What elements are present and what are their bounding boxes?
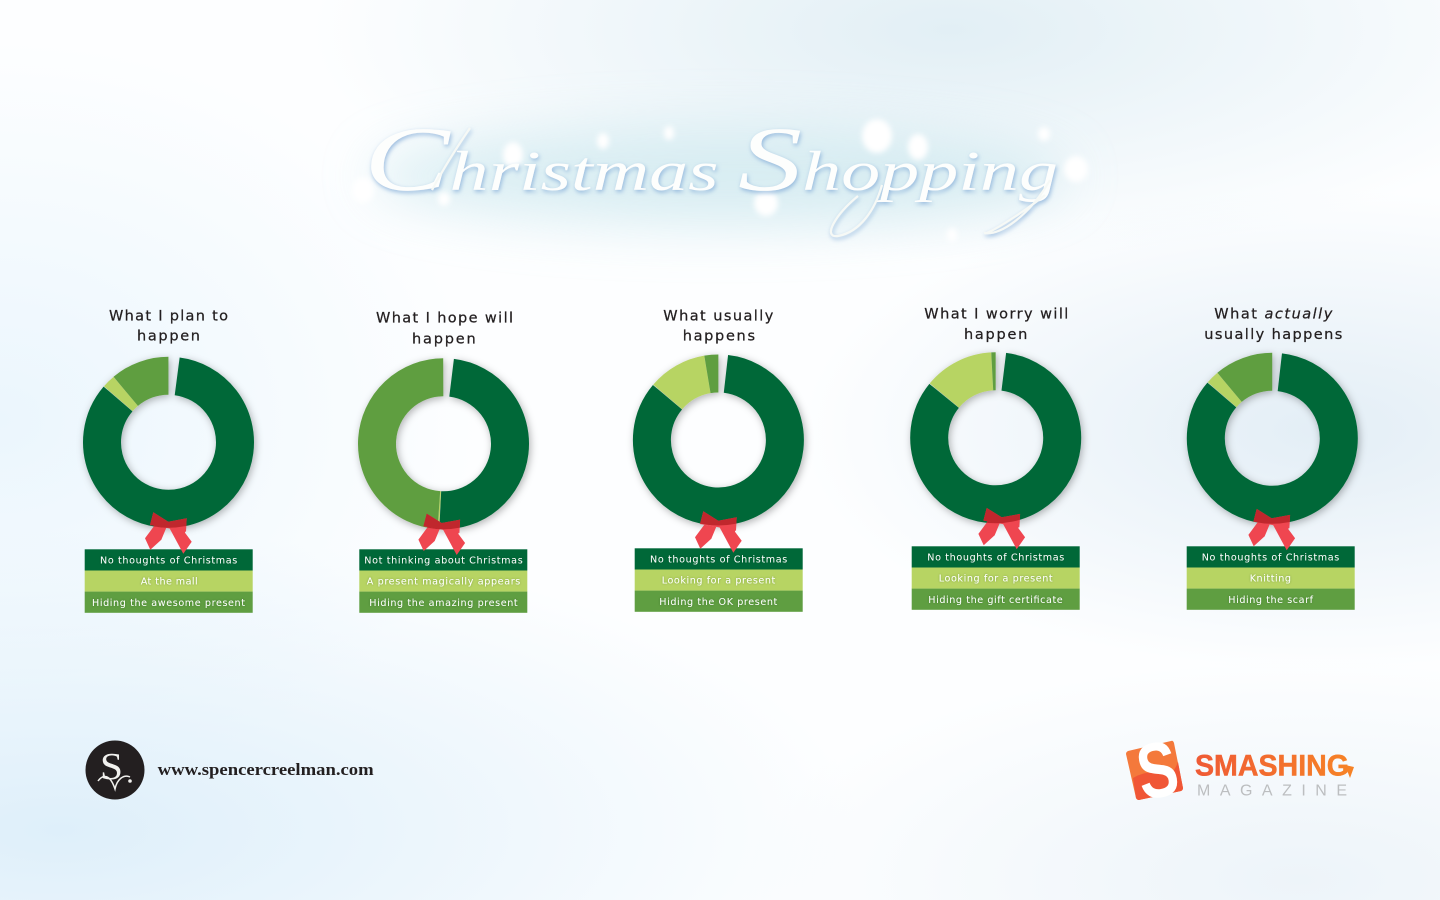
- legend text 3: [650, 554, 787, 608]
- heading 3: What usually: [663, 309, 774, 325]
- heading 2: What I hope will: [376, 310, 513, 326]
- legend text 1: [92, 555, 245, 609]
- legend text 2: Not thinking about Christmas: [364, 555, 523, 566]
- donut 5: [1178, 344, 1366, 532]
- heading 4: happen: [964, 327, 1027, 343]
- author website: www.spencercreelman.com: [158, 760, 374, 779]
- chart 5: What actually usually happens: [1178, 307, 1366, 610]
- chart 1: What I plan to happen: [75, 309, 262, 613]
- heading 4: [924, 306, 1068, 343]
- heading 1: happen: [137, 329, 200, 345]
- title with glow and snow bokeh: [352, 108, 1088, 242]
- legend bars 1: [85, 549, 253, 613]
- legend text 5: Hiding the scarf: [1228, 595, 1314, 606]
- chart 4: What I worry will happen: [902, 306, 1089, 610]
- legend text 5: Knitting: [1250, 574, 1291, 585]
- arrow on wordmark: [1345, 765, 1354, 778]
- chart 2: What I hope will happen: [359, 310, 527, 613]
- legend text 3: Looking for a present: [662, 576, 776, 587]
- bow 5: [1248, 509, 1295, 550]
- heading 3: [663, 309, 774, 345]
- legend bars 2: [359, 549, 527, 613]
- heading 3: happens: [683, 329, 755, 345]
- heading 2: happen: [412, 331, 476, 347]
- legend bars 4: [912, 546, 1080, 610]
- heading 2: [376, 310, 513, 347]
- legend text 5: [1202, 552, 1339, 606]
- author logo: SC monogram: S: [100, 746, 123, 788]
- legend text 3: Hiding the OK present: [659, 597, 778, 608]
- Smashing Magazine logo: [1126, 723, 1354, 817]
- bow 3: [695, 511, 742, 553]
- title with glow and snow bokeh: C hristmas S hopping: [364, 108, 1058, 210]
- bow 1: [145, 512, 192, 554]
- legend text 2: A present magically appears: [367, 577, 520, 588]
- bow 2: [418, 514, 465, 555]
- donut 3: [625, 346, 812, 534]
- legend text 4: Hiding the gift certificate: [928, 595, 1063, 606]
- legend text 4: [927, 552, 1064, 606]
- legend text 1: At the mall: [141, 577, 198, 588]
- heading 5: [1204, 307, 1342, 343]
- donut 1: [75, 348, 262, 536]
- legend text 1: Hiding the awesome present: [92, 598, 245, 609]
- heading 1: What I plan to: [109, 309, 228, 325]
- donut 4: [902, 344, 1089, 531]
- heading 1: [109, 309, 228, 345]
- legend text 1: No thoughts of Christmas: [100, 555, 237, 566]
- chart 3: What usually happens: [625, 309, 812, 612]
- donut 2: [369, 370, 518, 518]
- legend text 4: No thoughts of Christmas: [927, 552, 1064, 563]
- heading 4: What I worry will: [924, 306, 1068, 322]
- legend bars 5: [1187, 546, 1355, 610]
- legend bars 3: [635, 548, 803, 612]
- sub-wordmark: MAGAZINE: [1197, 783, 1347, 800]
- legend text 2: Hiding the amazing present: [369, 598, 518, 609]
- heading 5: What actually: [1214, 307, 1333, 323]
- legend text 2: [364, 555, 523, 609]
- legend text 5: No thoughts of Christmas: [1202, 552, 1339, 563]
- bow 4: [978, 508, 1025, 549]
- icon: tilted square with S: S: [1130, 723, 1185, 817]
- author logo: SC monogram: [86, 740, 144, 800]
- heading 5: usually happens: [1204, 327, 1342, 343]
- legend text 3: No thoughts of Christmas: [650, 554, 787, 565]
- legend text 4: Looking for a present: [939, 574, 1053, 585]
- wordmark: SMASHING: [1195, 750, 1349, 783]
